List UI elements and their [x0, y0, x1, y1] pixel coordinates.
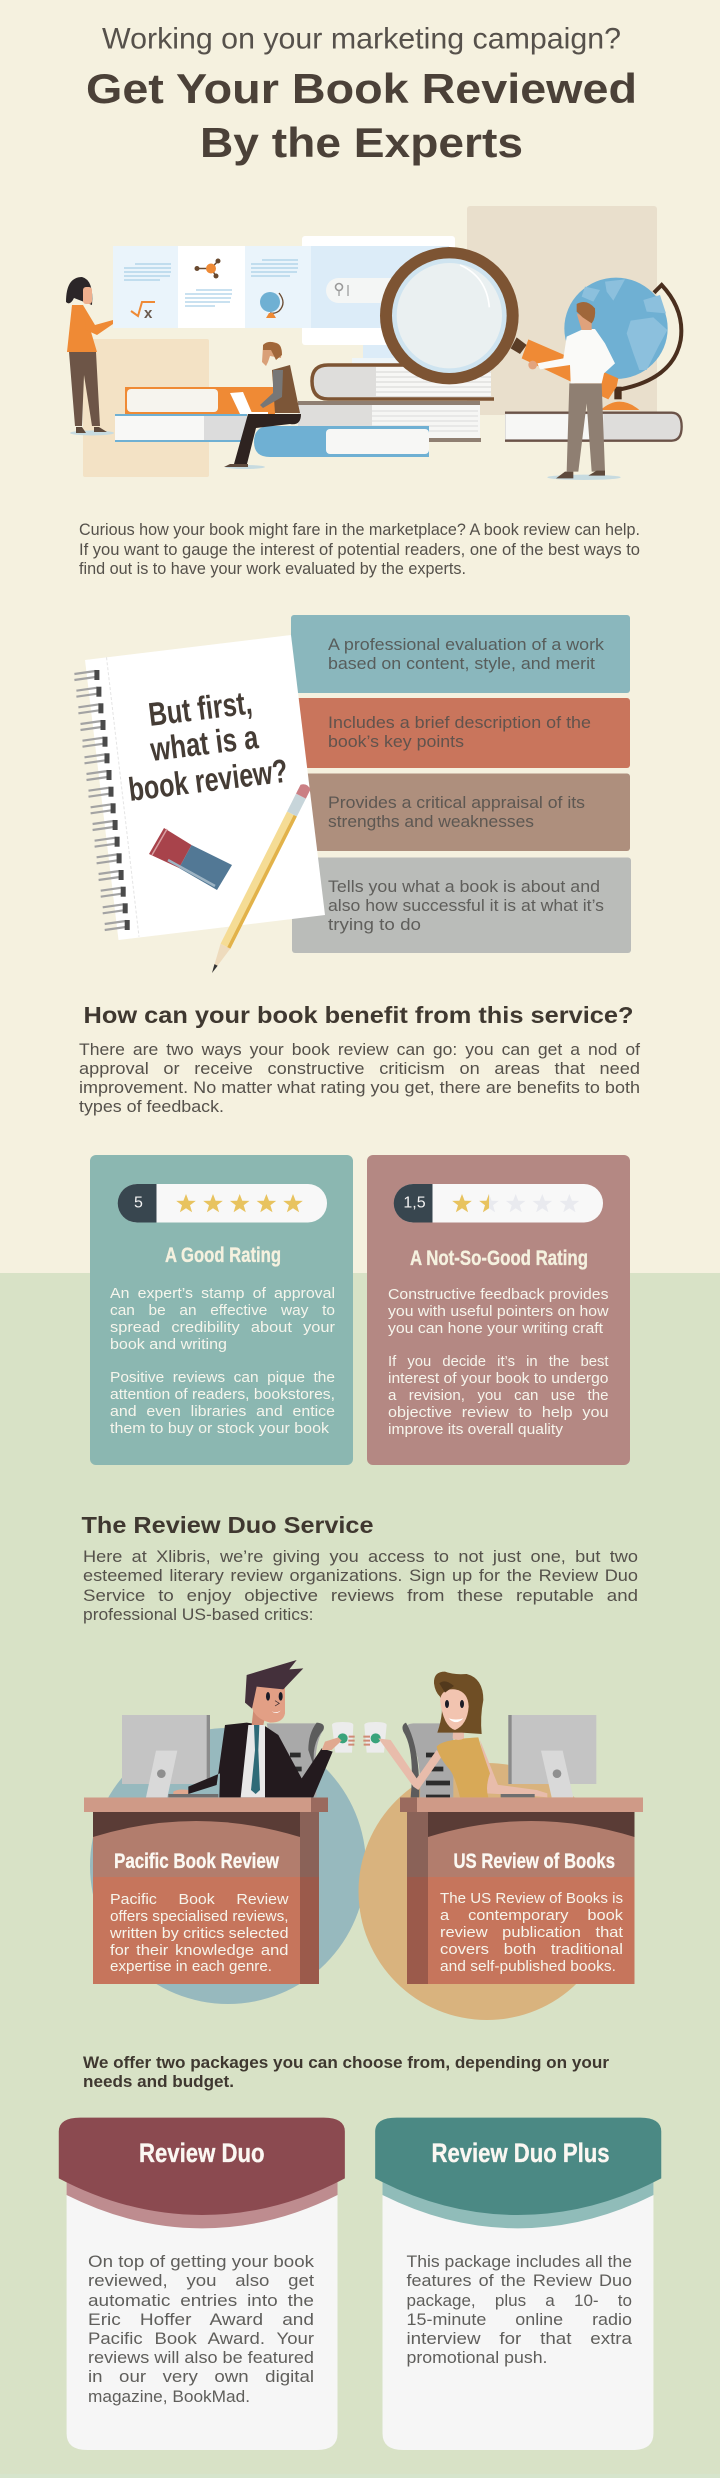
right desk	[400, 1798, 643, 1984]
strip: gray: also how successful it is at what it’s	[328, 897, 604, 915]
body text: Positive reviews can pique the	[110, 1370, 335, 1386]
panel: definition strips	[291, 615, 631, 953]
rating pill: 5 stars: 5	[134, 1194, 143, 1212]
title	[86, 22, 637, 166]
spiral binding	[74, 670, 130, 930]
body text: Constructive feedback provides	[388, 1287, 608, 1303]
review duo paragraph: esteemed literary review organizations. Sign up for the Review Duo	[83, 1566, 638, 1585]
strip: brown: Provides a critical appraisal of its	[328, 794, 585, 812]
strip: orange	[295, 698, 630, 768]
package description: interview for that extra	[406, 2330, 633, 2348]
desk description: written by critics selected	[109, 1926, 288, 1942]
main title line 2: By the Experts	[200, 119, 523, 166]
strip: teal	[291, 615, 630, 693]
strip: teal: A professional evaluation of a work	[328, 636, 605, 654]
body text: improve its overall quality	[388, 1422, 564, 1438]
package description: promotional push.	[406, 2349, 548, 2367]
left monitor	[122, 1715, 210, 1797]
right book	[505, 413, 682, 441]
package description: reviews will also be featured	[88, 2349, 314, 2367]
package title: Review Duo	[139, 2138, 264, 2168]
desk description: offers specialised reviews,	[110, 1909, 288, 1925]
package description: features of the Review Duo	[406, 2272, 632, 2290]
strip: orange: Includes a brief description of the	[328, 714, 591, 732]
panel: review duo plus package	[375, 2118, 661, 2450]
notebook page	[85, 635, 325, 940]
desk label: US Review of Books	[454, 1849, 615, 1873]
body text: objective review to help you	[388, 1405, 608, 1421]
globe	[564, 278, 681, 410]
icon: eraser	[149, 828, 232, 890]
monitor with search bar	[302, 236, 455, 364]
magnifying glass	[380, 247, 618, 399]
desk description: review publication that	[440, 1925, 623, 1941]
packages intro: We offer two packages you can choose from, depending on your	[83, 2054, 610, 2072]
panel: a not-so-good rating	[367, 1155, 630, 1465]
body text: can be an effective way to	[110, 1303, 335, 1319]
illustration: two reviewers at desks	[84, 1660, 643, 2020]
desk description: expertise in each genre.	[110, 1959, 272, 1975]
body text: book and writing	[110, 1337, 227, 1353]
left desk	[84, 1798, 328, 1984]
review duo paragraph: Service to enjoy objective reviews from these reputable and	[83, 1586, 638, 1605]
hero illustration: people, books, magnifier and globe	[66, 206, 682, 480]
package description: in our very own digital	[88, 2368, 314, 2386]
package description: On top of getting your book	[88, 2253, 315, 2271]
panel: review duo package	[59, 2118, 345, 2450]
strip: gray: trying to do	[328, 916, 421, 934]
package title: Review Duo Plus	[432, 2138, 610, 2168]
benefits paragraph	[79, 1040, 640, 1116]
strip: gray	[292, 858, 631, 953]
card shapes	[375, 2118, 661, 2450]
notebook heading: book review?	[126, 752, 290, 808]
background blocks	[83, 206, 657, 477]
man	[168, 1660, 333, 1797]
package description	[88, 2253, 315, 2406]
strip: brown	[300, 774, 630, 851]
info panels: x	[144, 305, 153, 322]
body text: An expert’s stamp of approval	[110, 1286, 335, 1302]
package description: This package includes all the	[406, 2253, 632, 2271]
strip: orange: book’s key points	[328, 733, 464, 751]
body text: you with useful pointers on how	[388, 1304, 609, 1320]
man and woman with coffee cups	[122, 1660, 596, 1797]
desk description: covers both traditional	[440, 1942, 623, 1958]
icon: pencil	[207, 782, 311, 975]
benefits paragraph: There are two ways your book review can go: you can get a nod of	[79, 1040, 640, 1059]
package description: magazine, BookMad.	[88, 2388, 250, 2406]
package description: package, plus a 10- to	[406, 2292, 632, 2310]
main title line 1: Get Your Book Reviewed	[86, 65, 637, 112]
background circles	[90, 1728, 616, 2020]
intro paragraph: Curious how your book might fare in the marketplace? A book review can help.	[79, 520, 640, 539]
package description: Eric Hoffer Award and	[88, 2311, 314, 2329]
heading: benefits: How can your book benefit from this service?	[84, 1002, 634, 1028]
right-hand detail: book, magnifier, globe and standing man	[380, 247, 682, 480]
desk label: Pacific Book Review	[114, 1849, 279, 1873]
notebook heading: what is a	[148, 718, 261, 768]
notebook heading: But first,	[146, 684, 254, 733]
intro paragraph: If you want to gauge the interest of potential readers, one of the best ways to	[79, 540, 640, 559]
person: seated man with laptop	[224, 342, 301, 469]
card shapes	[59, 2118, 345, 2450]
strip: brown: strengths and weaknesses	[328, 813, 534, 831]
subtitle: Working on your marketing campaign?	[102, 22, 621, 56]
body text: them to buy or stock your book	[110, 1421, 330, 1437]
body text: and even libraries and entice	[110, 1404, 335, 1420]
package description: automatic entries into the	[88, 2292, 314, 2310]
packages intro: needs and budget.	[83, 2073, 234, 2091]
package description	[406, 2253, 633, 2367]
strip: gray: Tells you what a book is about and	[328, 878, 600, 896]
benefits paragraph: approval or receive constructive criticism on areas that need	[79, 1059, 640, 1078]
desk description: Pacific Book Review	[110, 1892, 289, 1908]
body text	[110, 1286, 335, 1437]
desk description: a contemporary book	[440, 1908, 624, 1924]
desk description	[440, 1891, 624, 1975]
heading: the review duo service: The Review Duo Service	[82, 1512, 374, 1538]
body text: you can hone your writing craft	[388, 1321, 603, 1337]
rating pill: 1.5 stars: 1,5	[403, 1194, 426, 1212]
body text: attention of readers, bookstores,	[110, 1387, 335, 1403]
review duo paragraph: Here at Xlibris, we’re giving you access to not just one, but two	[83, 1547, 638, 1566]
intro paragraph	[79, 520, 640, 578]
review duo paragraph: professional US-based critics:	[83, 1605, 314, 1624]
info panels	[113, 246, 311, 328]
woman	[378, 1672, 547, 1797]
person: standing man	[528, 302, 621, 480]
body text: If you decide it’s in the best	[388, 1354, 608, 1370]
left chair	[267, 1723, 324, 1797]
rating pill: 5 stars	[118, 1184, 327, 1222]
right monitor	[501, 1715, 596, 1797]
person: standing woman	[66, 277, 114, 436]
coffee cups	[322, 1722, 387, 1753]
intro paragraph: find out is to have your work evaluated by the experts.	[79, 559, 466, 578]
book stack	[115, 365, 494, 457]
notebook: but first, what is a book review?	[74, 635, 325, 975]
body text: spread credibility about your	[110, 1320, 335, 1336]
body text: a revision, you can use the	[388, 1388, 608, 1404]
desk description: for their knowledge and	[110, 1943, 288, 1959]
package description: 15-minute online radio	[406, 2311, 632, 2329]
desk description: and self-published books.	[440, 1959, 616, 1975]
package description: reviewed, you also get	[88, 2272, 314, 2290]
desk description: The US Review of Books is	[440, 1891, 623, 1907]
desk description	[109, 1892, 289, 1975]
heading: A Not-So-Good Rating	[410, 1247, 588, 1270]
body text	[388, 1287, 609, 1438]
notebook heading	[126, 684, 290, 808]
body text: interest of your book to undergo	[388, 1371, 608, 1387]
strip: teal: based on content, style, and merit	[328, 655, 595, 673]
heading: A Good Rating	[165, 1244, 281, 1267]
benefits paragraph: types of feedback.	[79, 1097, 224, 1116]
rating pill: 1.5 stars	[394, 1184, 603, 1222]
package description: Pacific Book Award. Your	[88, 2330, 315, 2348]
panel: a good rating	[90, 1155, 353, 1465]
benefits paragraph: improvement. No matter what rating you get, there are benefits to both	[79, 1078, 640, 1097]
packages intro	[83, 2054, 610, 2091]
review duo paragraph	[83, 1547, 638, 1624]
right chair	[402, 1723, 453, 1797]
